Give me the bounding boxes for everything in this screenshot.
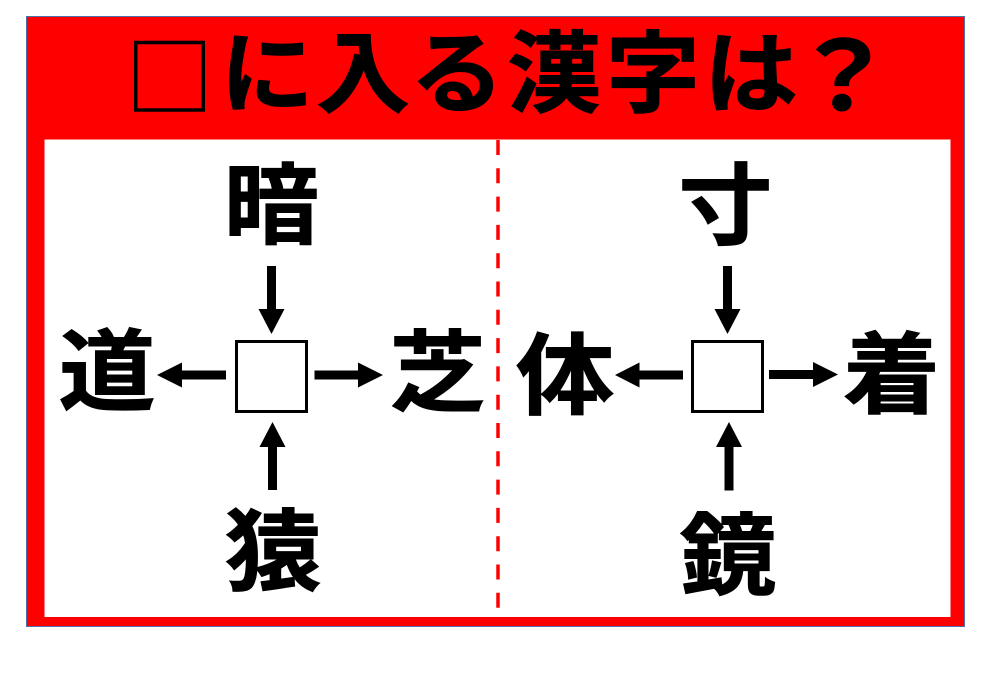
title text: に入る漢字は — [220, 26, 798, 125]
arrow right — [314, 362, 383, 388]
center blank box — [236, 342, 306, 412]
right puzzle — [516, 158, 940, 607]
kanji bottom: 猿 — [225, 503, 321, 603]
title — [136, 25, 895, 131]
kanji top: 寸 — [678, 158, 773, 257]
title blank box — [136, 42, 203, 110]
kanji left: 道 — [59, 323, 155, 423]
center blank box — [692, 342, 762, 412]
kanji left: 体 — [516, 327, 614, 426]
left puzzle — [59, 157, 486, 603]
kanji top: 暗 — [224, 157, 319, 256]
arrow right — [769, 362, 838, 387]
kanji right: 芝 — [389, 324, 486, 424]
arrow left — [157, 362, 226, 388]
arrow down — [714, 266, 740, 334]
arrow up — [260, 422, 286, 490]
center divider dashed line — [496, 140, 500, 617]
arrow up — [716, 422, 742, 490]
kanji right: 着 — [843, 326, 940, 426]
arrow left — [615, 362, 683, 388]
kanji bottom: 鏡 — [680, 507, 776, 607]
white content panel — [44, 140, 950, 617]
title question mark: ？ — [791, 25, 895, 131]
arrow down — [258, 266, 284, 334]
